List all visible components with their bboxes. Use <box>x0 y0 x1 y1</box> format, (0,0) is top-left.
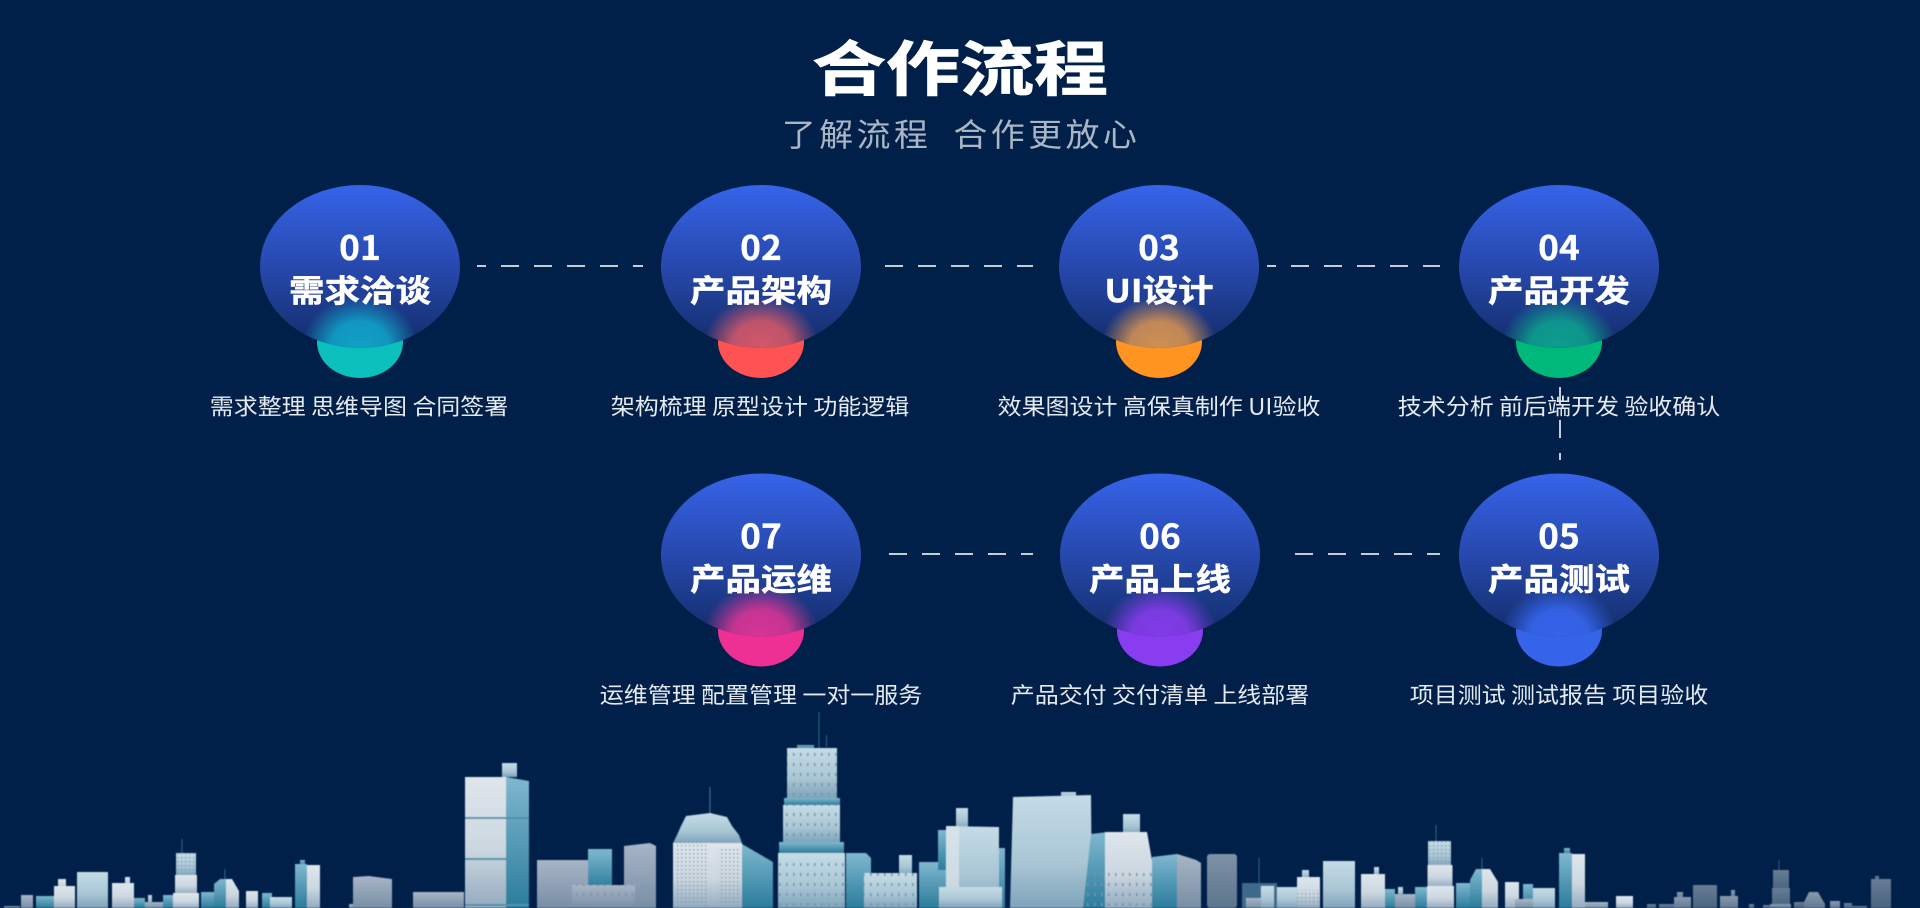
connector: 05 to 06 <box>1295 553 1440 555</box>
connector: 02 to 03 <box>885 265 1033 267</box>
right cluster <box>1323 825 1633 908</box>
central skyscraper <box>778 712 871 908</box>
step 07: 07 <box>740 509 782 558</box>
far right dim cluster <box>1647 860 1891 908</box>
step 01 <box>210 185 508 421</box>
step 01: 需求洽谈 <box>289 266 431 311</box>
subtitle: 了解流程 合作更放心 <box>782 109 1140 156</box>
step 04: 产品开发 <box>1488 266 1630 311</box>
step 04: 04 <box>1538 221 1580 270</box>
connector: 04 to 05 <box>1559 387 1561 460</box>
step 02: 02 <box>740 221 782 270</box>
centre-right blocks <box>864 792 1320 908</box>
connector: 03 to 04 <box>1267 265 1440 267</box>
step 07: 运维管理 配置管理 一对一服务 <box>600 677 922 710</box>
tall slab tower <box>465 763 529 908</box>
far left cluster <box>4 839 464 908</box>
step 05: 05 <box>1538 509 1580 558</box>
mid-left blocks <box>537 787 773 908</box>
step 02 <box>611 185 909 421</box>
step 07 <box>600 474 922 710</box>
title: 合作流程 <box>812 22 1108 108</box>
step 05 <box>1410 474 1708 710</box>
step 02: 产品架构 <box>690 266 832 311</box>
step 04 <box>1398 185 1720 421</box>
city skyline <box>4 712 1891 908</box>
step 03: 效果图设计 高保真制作 UI验收 <box>998 388 1320 421</box>
step 03: UI设计 <box>1104 266 1214 311</box>
step 02: 架构梳理 原型设计 功能逻辑 <box>611 388 909 421</box>
step 03: 03 <box>1138 221 1180 270</box>
step 04: 技术分析 前后端开发 验收确认 <box>1398 388 1720 421</box>
step 01: 01 <box>339 221 381 270</box>
step 06 <box>1011 474 1309 710</box>
step 05: 产品测试 <box>1488 554 1630 600</box>
step 06: 06 <box>1139 509 1181 558</box>
connector: 01 to 02 <box>477 265 643 267</box>
step 06: 产品上线 <box>1089 554 1231 600</box>
step 01: 需求整理 思维导图 合同签署 <box>210 388 508 421</box>
connector: 06 to 07 <box>889 553 1033 555</box>
step 05: 项目测试 测试报告 项目验收 <box>1410 677 1708 710</box>
step 07: 产品运维 <box>690 554 832 600</box>
step 03 <box>998 185 1320 421</box>
step 06: 产品交付 交付清单 上线部署 <box>1011 677 1309 710</box>
